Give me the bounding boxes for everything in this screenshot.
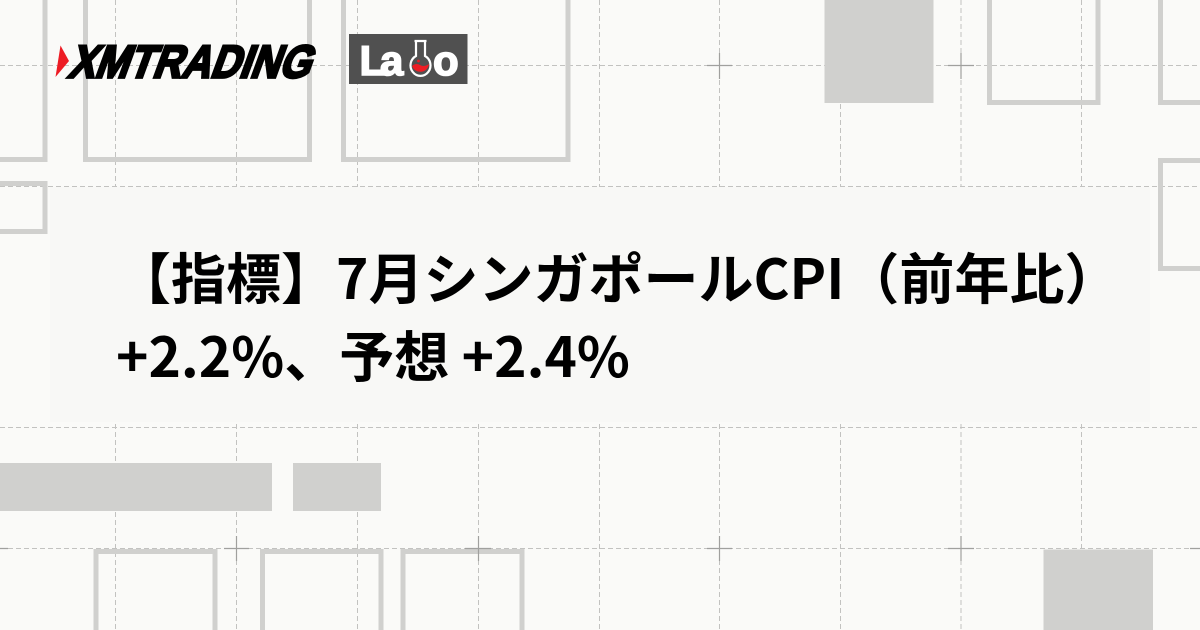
logo letters: a: [380, 37, 404, 84]
logo: Lab: [349, 34, 468, 84]
title: [116, 235, 1119, 393]
icon: red triangle mark: [56, 46, 69, 77]
title: 【指標】7月シンガポールCPI（前年比）: [116, 235, 1119, 315]
logo letters: o: [433, 37, 459, 84]
title: +2.2%、予想 +2.4%: [116, 313, 630, 393]
logo: XMTRADING: [56, 38, 322, 84]
icon: flask: [411, 41, 431, 76]
logo letters: L: [360, 37, 385, 84]
